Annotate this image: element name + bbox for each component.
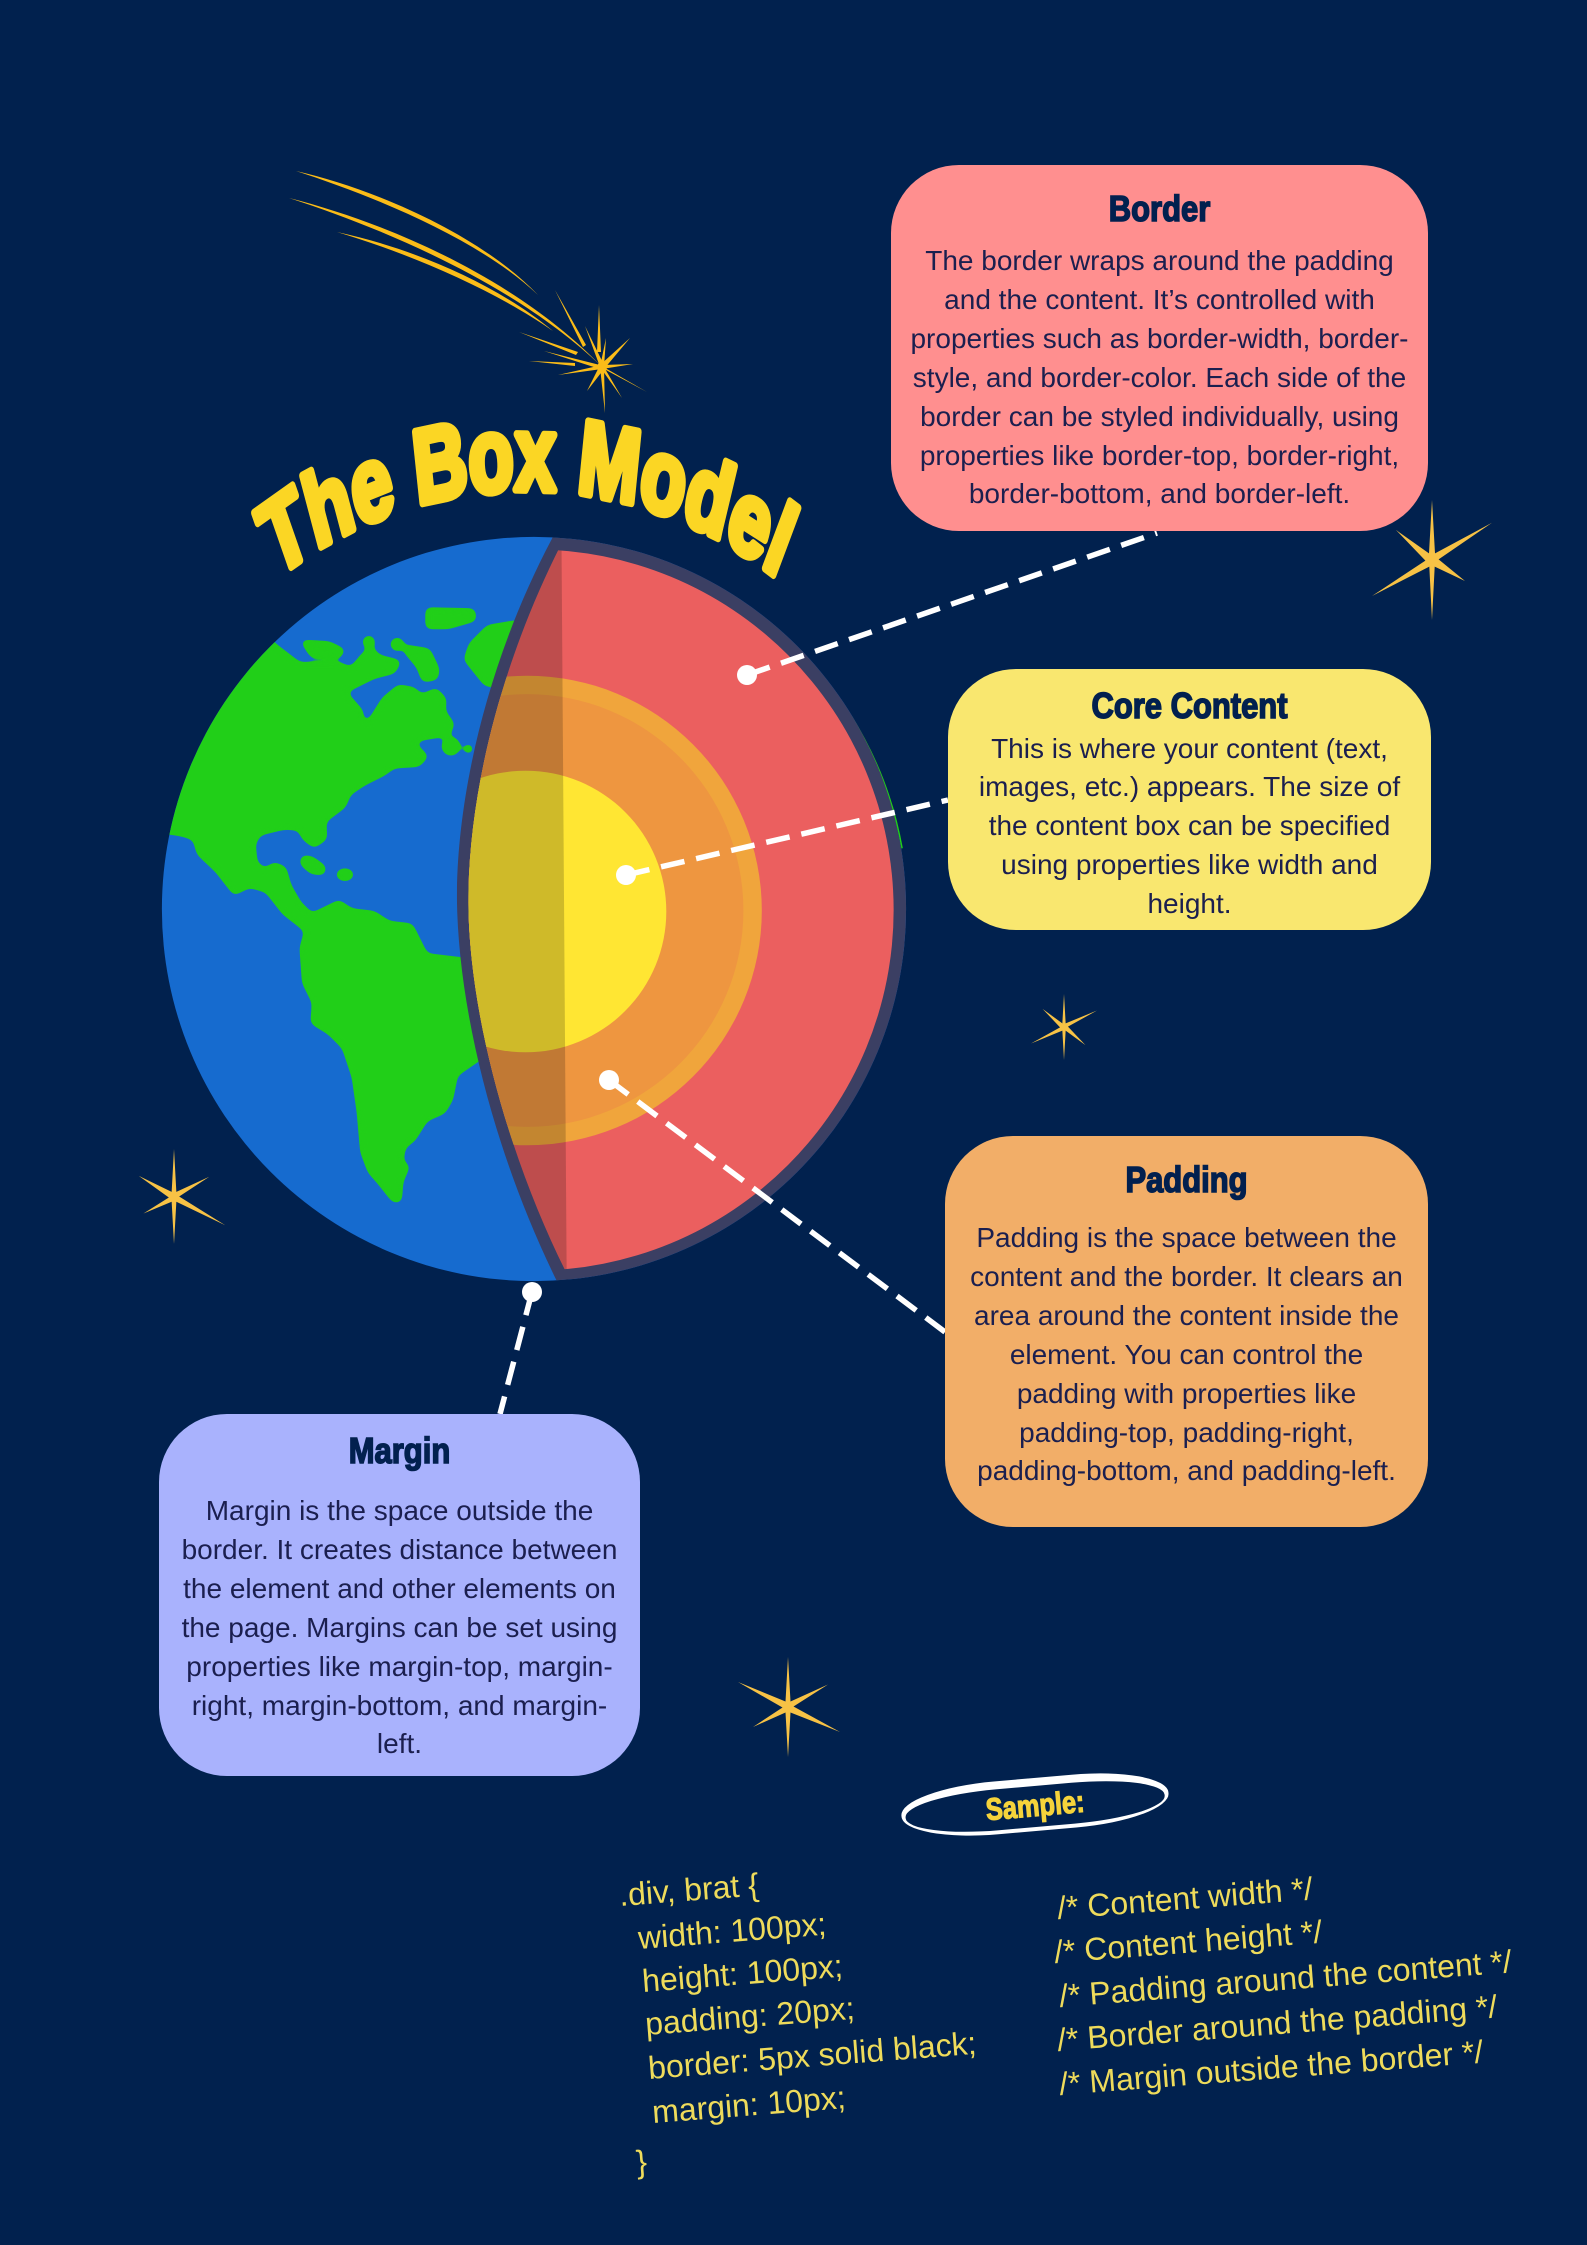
star: left	[139, 1149, 225, 1244]
text: margin: the page. Margins can be set using	[182, 1612, 617, 1643]
sample label	[899, 1766, 1171, 1843]
star: middle right	[1031, 994, 1097, 1060]
heading: core content: Core Content	[1091, 685, 1288, 726]
heading: margin: Margin	[349, 1430, 450, 1471]
text: padding: padding with properties like	[1017, 1378, 1356, 1409]
text: padding	[970, 1222, 1403, 1486]
text: core content: height.	[1147, 888, 1232, 919]
globe	[162, 536, 906, 1282]
mantle and core layers	[292, 520, 762, 1296]
crust layer	[468, 550, 894, 1270]
cut-away outline	[457, 538, 906, 1280]
text: margin: left.	[377, 1728, 422, 1759]
connector: core content	[616, 800, 948, 885]
text: margin	[182, 1495, 617, 1759]
text: border: properties such as border-width, border-	[910, 323, 1408, 354]
text: padding: area around the content inside the	[974, 1300, 1399, 1331]
code sample: comments: /* Border around the padding */	[1056, 1988, 1499, 2058]
text: border: properties like border-top, border-right,	[920, 440, 1399, 471]
text: padding: padding-bottom, and padding-left.	[977, 1455, 1396, 1486]
text: border: border-bottom, and border-left.	[969, 478, 1350, 509]
text: border: style, and border-color. Each side of the	[913, 362, 1406, 393]
text: padding: Padding is the space between the	[976, 1222, 1397, 1253]
star: top right	[1372, 500, 1492, 620]
panel: border	[891, 165, 1428, 531]
connector: border	[737, 533, 1157, 685]
text: margin: the element and other elements on	[183, 1573, 616, 1604]
text: margin: Margin is the space outside the	[206, 1495, 593, 1526]
connector: margin	[500, 1282, 542, 1414]
code sample: comments: /* Padding around the content */	[1058, 1943, 1513, 2014]
heading: border: Border	[1109, 188, 1210, 229]
code sample: comments: /* Content width */	[1056, 1870, 1314, 1926]
brush ring	[899, 1766, 1171, 1843]
title: The Box Model	[251, 417, 802, 580]
text: border: and the content. It’s controlled with	[944, 284, 1375, 315]
star: bottom	[738, 1657, 840, 1757]
text: border	[910, 245, 1408, 509]
thin green rim	[851, 716, 902, 848]
heading: padding: Padding	[1125, 1159, 1248, 1200]
Greenland-side islands	[428, 610, 474, 627]
text: core content: using properties like width and	[1001, 849, 1378, 880]
text: margin: border. It creates distance between	[182, 1534, 617, 1565]
panel: core content	[948, 669, 1431, 930]
text: core content: the content box can be specified	[989, 810, 1390, 841]
panel: padding	[945, 1136, 1428, 1527]
text: margin: properties like margin-top, margin-	[186, 1651, 613, 1682]
code sample: declarations: padding: 20px;	[644, 1990, 856, 2042]
text: padding: content and the border. It clears an	[970, 1261, 1403, 1292]
panel: margin	[159, 1414, 640, 1776]
code sample: declarations: margin: 10px;	[651, 2079, 847, 2130]
text: padding: padding-top, padding-right,	[1019, 1417, 1354, 1448]
text: core content	[979, 732, 1400, 919]
code sample: declarations: }	[635, 2143, 649, 2180]
text: core content: images, etc.) appears. The size of	[979, 771, 1400, 802]
code sample: declarations: border: 5px solid black;	[647, 2025, 978, 2086]
code sample: declarations: .div, brat {	[618, 1866, 760, 1913]
cut-away interior	[468, 550, 894, 1270]
code sample: declarations: width: 100px;	[636, 1906, 828, 1956]
ocean	[162, 537, 906, 1281]
text: padding: element. You can control the	[1010, 1339, 1363, 1370]
sample text: Sample:	[984, 1784, 1086, 1828]
text: core content: This is where your content (text,	[991, 732, 1388, 764]
code sample: declarations: height: 100px;	[641, 1948, 844, 1999]
text: margin: right, margin-bottom, and margin-	[192, 1690, 607, 1721]
comet	[289, 171, 647, 413]
code sample: declarations	[618, 1866, 978, 2180]
code sample: comments	[1053, 1870, 1513, 2102]
text: border: The border wraps around the padding	[925, 245, 1394, 276]
continents	[169, 607, 514, 1202]
code sample: comments: /* Content height */	[1053, 1913, 1323, 1970]
connector: padding	[599, 1070, 945, 1332]
code sample: comments: /* Margin outside the border */	[1058, 2033, 1485, 2102]
text: border: border can be styled individually, using	[920, 401, 1399, 432]
